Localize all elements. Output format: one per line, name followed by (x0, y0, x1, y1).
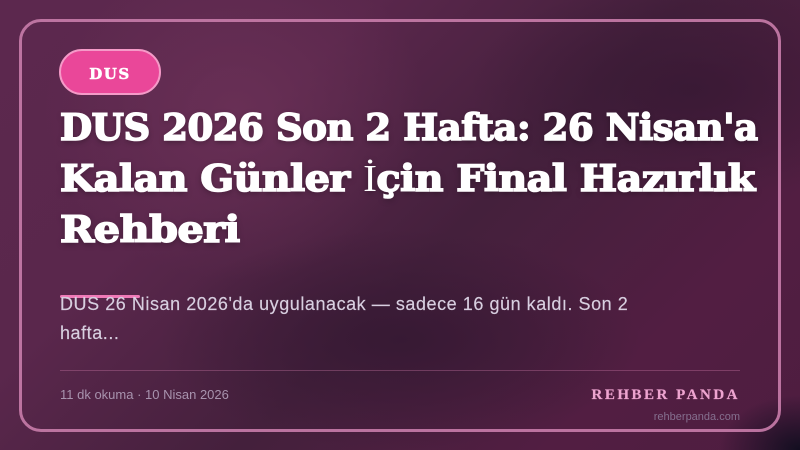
category badge (59, 49, 161, 95)
title: DUS 2026 Son 2 Hafta: 26 Nisan'a (60, 107, 758, 149)
divider (60, 370, 740, 371)
reading time and date: 11 dk okuma · 10 Nisan 2026 (60, 387, 229, 402)
accent line (60, 295, 140, 298)
title: Kalan Günler İçin Final Hazırlık (60, 158, 755, 200)
description: hafta... (60, 323, 119, 343)
website: rehberpanda.com (654, 411, 740, 423)
description: DUS 26 Nisan 2026'da uygulanacak — sadece 16 gün kaldı. Son 2 (60, 294, 628, 314)
title: Rehberi (60, 209, 240, 251)
category badge: DUS (89, 65, 131, 83)
brand name: REHBER PANDA (592, 387, 740, 403)
title (60, 107, 758, 251)
description (60, 294, 628, 343)
